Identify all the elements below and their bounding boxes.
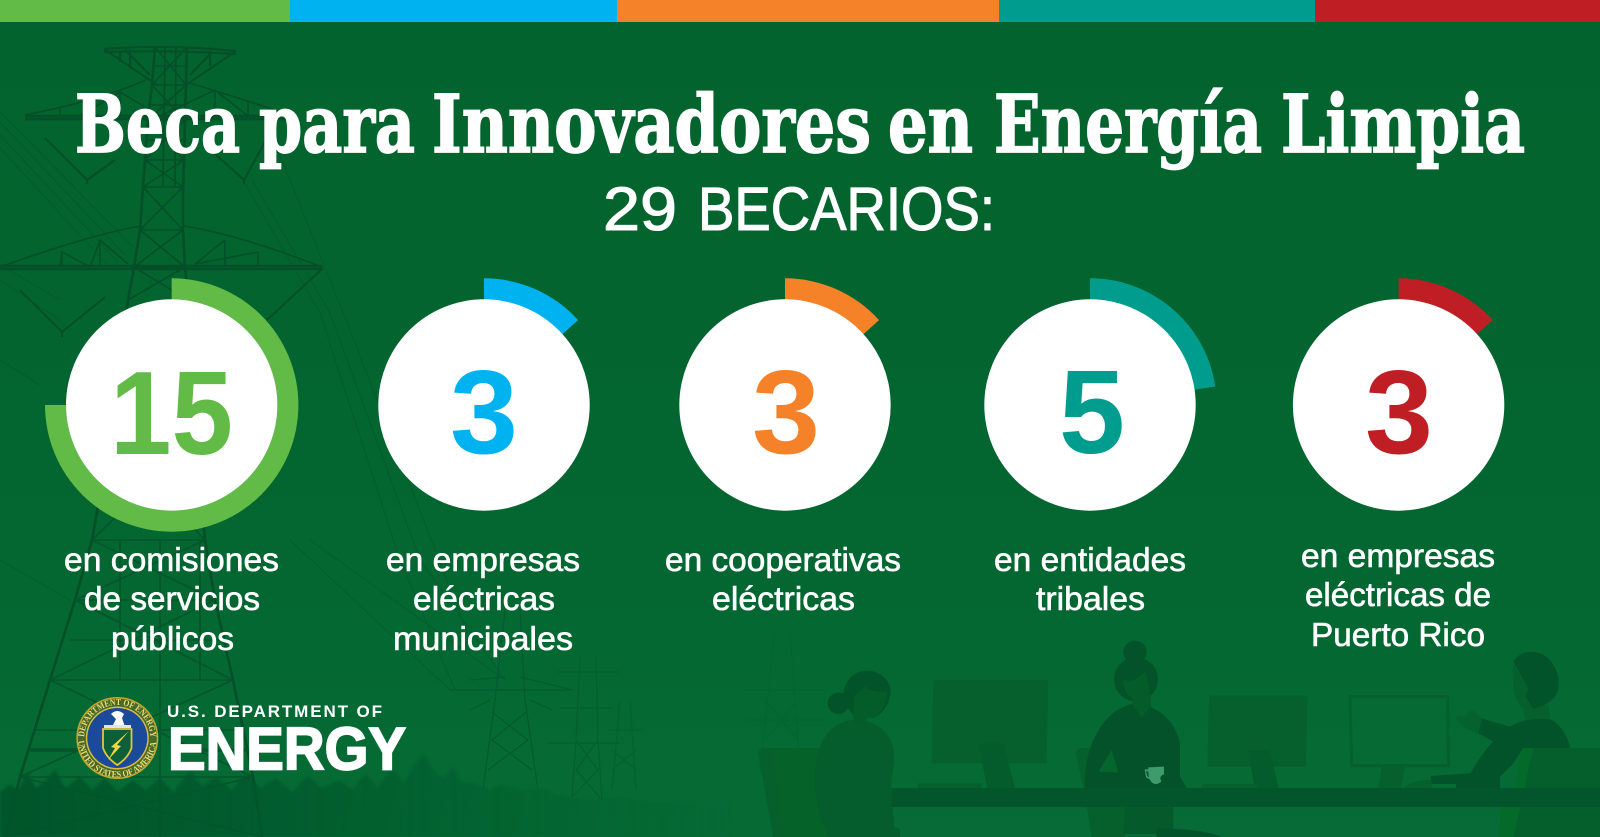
colour bar (0, 0, 1600, 22)
label: en comisiones (64, 541, 279, 578)
person 3 (1403, 652, 1570, 788)
title: en (888, 77, 973, 171)
monitor 3 (1350, 697, 1449, 788)
ring (45, 278, 298, 532)
label (386, 541, 580, 657)
stat: 3 municipales (378, 278, 590, 657)
title: Limpia (1281, 77, 1525, 171)
stat: 3 cooperativas (665, 278, 901, 617)
label: municipales (393, 620, 573, 657)
ring (1090, 278, 1215, 390)
label: Puerto Rico (1311, 616, 1485, 653)
label: públicos (111, 620, 234, 657)
chair 1 (758, 748, 830, 837)
person 1 (815, 671, 900, 837)
department text: U.S. DEPARTMENT OF (167, 702, 382, 721)
background: large transmission tower (0, 47, 323, 837)
background: office scene right (1157, 652, 1600, 837)
logo: U.S. Department of Energy (76, 697, 406, 782)
title (75, 77, 1525, 171)
circle (679, 299, 891, 511)
chair 2 (1076, 748, 1125, 837)
circle (984, 299, 1196, 511)
stat: 5 tribales (984, 278, 1215, 617)
label: de servicios (84, 580, 260, 617)
stat: 15 comisiones (45, 278, 298, 657)
number: 3 (752, 346, 820, 479)
energy wordmark: ENERGY (168, 716, 406, 782)
stat: 3 Puerto Rico (1293, 278, 1504, 653)
title: Innovadores (432, 77, 871, 171)
circle (1293, 299, 1504, 511)
chair base (1157, 828, 1222, 837)
number: 15 (110, 347, 233, 480)
seal: DEPARTMENT OF ENERGY (78, 698, 156, 737)
title: para (259, 77, 415, 171)
subtitle: BECARIOS: (698, 175, 995, 243)
subtitle: 29 (603, 175, 677, 243)
label: en empresas (1301, 537, 1495, 574)
label: eléctricas (712, 580, 855, 617)
monitor 2 (1202, 696, 1307, 788)
title: Energía (994, 77, 1262, 171)
circle (378, 299, 590, 511)
label: tribales (1036, 580, 1145, 617)
label (994, 541, 1186, 617)
number: 3 (1365, 346, 1433, 479)
label: eléctricas (413, 580, 555, 617)
number: 3 (450, 346, 518, 479)
ring (1399, 278, 1493, 335)
background: office scene left (758, 641, 1600, 837)
coffee mug (1145, 767, 1164, 784)
background: distant towers (450, 610, 825, 800)
background: tree line (0, 753, 850, 837)
subtitle (603, 175, 995, 243)
person 2 (1085, 641, 1187, 834)
label (64, 541, 279, 657)
seal (76, 697, 158, 779)
ring (785, 278, 879, 335)
monitor 1 (918, 680, 1048, 788)
label: en entidades (994, 541, 1186, 578)
desk (892, 788, 1600, 807)
label: en cooperativas (665, 541, 901, 578)
number: 5 (1059, 346, 1125, 479)
label: eléctricas de (1305, 576, 1491, 613)
circle (66, 299, 277, 511)
chair 3 (1499, 748, 1600, 837)
background: power lines (0, 112, 505, 690)
ring (484, 278, 578, 335)
label (1301, 537, 1495, 653)
label: en empresas (386, 541, 580, 578)
title: Beca (75, 77, 240, 171)
seal: UNITED STATES OF AMERICA (78, 740, 156, 778)
label (665, 541, 901, 617)
